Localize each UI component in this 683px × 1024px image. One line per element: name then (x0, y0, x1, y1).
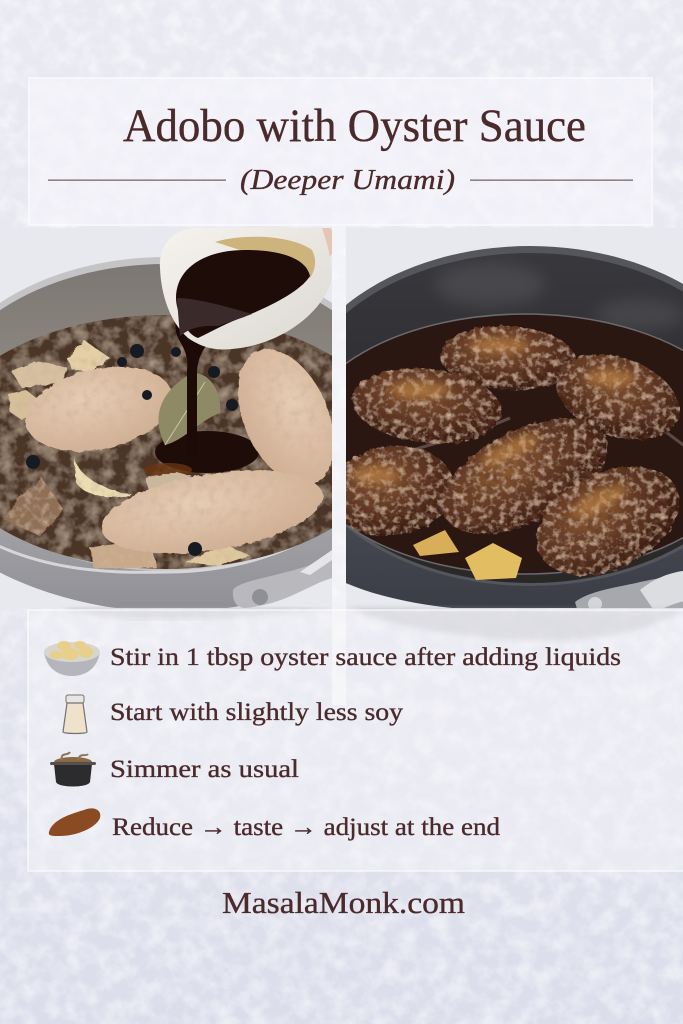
vertical strip between the photos (332, 226, 346, 705)
step 3 text: Simmer as usual (110, 756, 299, 783)
subtitle: (Deeper Umami) (240, 164, 455, 196)
pan: dark nonstick (346, 246, 683, 608)
finger (322, 228, 332, 256)
faint pan continuation under the steps panel (60, 608, 683, 641)
subtitle rule left (48, 180, 226, 181)
pan: stainless steel (0, 257, 332, 608)
step 2 text: Start with slightly less soy (110, 699, 404, 726)
step 1 text: Stir in 1 tbsp oyster sauce after adding liquids (110, 644, 621, 671)
step 1: oyster sauce bowl icon (44, 641, 100, 676)
steps panel (28, 226, 683, 871)
bay leaf (159, 373, 220, 445)
pan handle (232, 550, 332, 608)
title panel (28, 77, 653, 226)
photo: oyster sauce being poured into pale adobo (0, 228, 332, 608)
sauce surface (346, 313, 683, 575)
pan handle (575, 570, 683, 608)
step 4: glazed chicken icon (49, 808, 100, 836)
step 3: simmering pot icon (50, 752, 96, 786)
broth surface (0, 315, 332, 569)
sauce stream (176, 324, 206, 434)
step 2: soy bottle icon (63, 695, 87, 734)
website footer: MasalaMonk.com (222, 885, 465, 920)
photo: finished glossy adobo in dark pan (346, 228, 683, 608)
gloss highlights on chicken (351, 338, 635, 521)
chicken breasts (25, 348, 332, 554)
title: Adobo with Oyster Sauce (123, 100, 586, 152)
pineapple chunks (413, 530, 522, 580)
step 4 text: Reduce → taste → adjust at the end (112, 814, 501, 841)
subtitle rule right (470, 180, 633, 181)
peppercorns (26, 344, 238, 556)
bowl of oyster sauce (160, 228, 332, 349)
potato chunks (4, 340, 250, 568)
glazed chicken pieces (346, 324, 680, 577)
